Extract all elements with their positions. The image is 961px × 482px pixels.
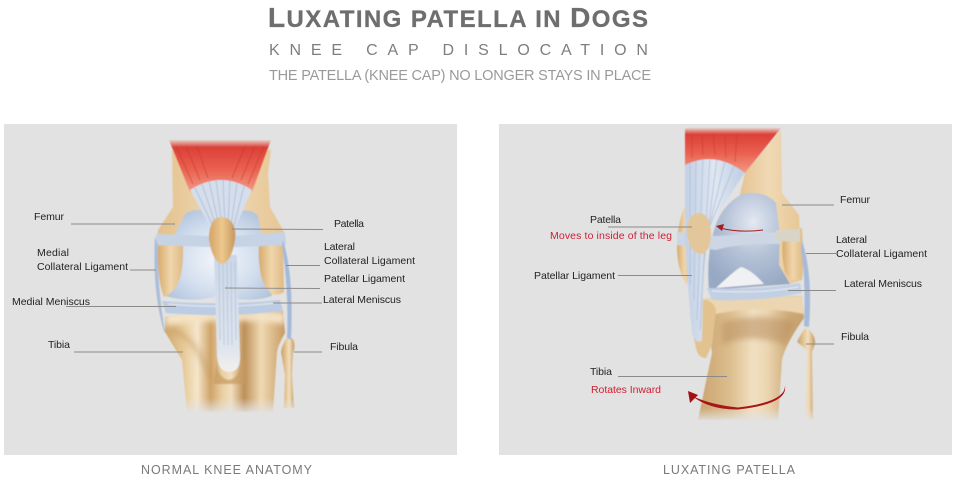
- tibia: [165, 310, 285, 412]
- label: Patella: [590, 214, 692, 227]
- label: Fibula: Fibula: [841, 331, 869, 343]
- ligament fibres: [219, 262, 236, 345]
- arrow: tibia rotates inward: [688, 386, 785, 410]
- label: Lateral Meniscus: [273, 294, 401, 306]
- subtitle: KNEE CAP DISLOCATION: [269, 42, 648, 59]
- label: Lateral Meniscus: Lateral Meniscus: [323, 294, 401, 306]
- label: Medial Collateral Ligament: Medial: [37, 247, 69, 259]
- tibial tuberosity: [690, 299, 716, 358]
- quadriceps muscle: [685, 128, 781, 173]
- tendon fibres: [690, 157, 734, 330]
- illustration: normal knee: [154, 140, 294, 412]
- fibula: [281, 338, 294, 408]
- notch: [716, 267, 764, 288]
- label: Lateral Meniscus: Lateral Meniscus: [844, 278, 922, 290]
- femoral condyles: [708, 193, 790, 290]
- label: Fibula: Fibula: [330, 341, 358, 353]
- arrow: patella moves inward: [716, 224, 763, 231]
- patella: [209, 217, 235, 264]
- caption: normal knee anatomy: NORMAL KNEE ANATOMY: [141, 463, 313, 477]
- caption: luxating patella: LUXATING PATELLA: [663, 463, 796, 477]
- femur: [156, 150, 284, 250]
- band over femur: [776, 229, 800, 242]
- label: Tibia: [590, 366, 727, 378]
- bottom fade: [175, 398, 305, 414]
- label: Patella: [232, 218, 364, 230]
- meniscus: [707, 283, 802, 300]
- tibia: [698, 296, 804, 420]
- tendon fan: [190, 180, 252, 226]
- label: Lateral Collateral Ligament: [286, 241, 415, 267]
- label: Tibia: [48, 339, 183, 352]
- label: Femur: [782, 194, 870, 206]
- label: Patella: Patella: [590, 214, 621, 226]
- meniscus highlight: [712, 287, 798, 292]
- label: Fibula: [806, 331, 869, 344]
- panel: normal knee anatomy: [4, 124, 457, 455]
- label: Medial Collateral Ligament: [37, 247, 156, 273]
- muscle fibres: [176, 146, 264, 184]
- fibula: [797, 327, 815, 420]
- transverse band: [677, 232, 780, 250]
- label: Patellar Ligament: Patellar Ligament: [534, 270, 615, 282]
- lateral femur condyle bone: [259, 245, 284, 295]
- femoral condyles: [165, 210, 272, 300]
- bottom fade: [690, 408, 820, 422]
- meniscus highlight: [168, 303, 276, 306]
- tagline: THE PATELLA (KNEE CAP) NO LONGER STAYS IN PLACE: [269, 68, 651, 84]
- label: Medial Collateral Ligament: Collateral Ligament: [37, 261, 128, 273]
- label: Tibia: Tibia: [590, 366, 612, 378]
- patella: [687, 213, 711, 254]
- callout: rotates inward: Rotates Inward: [591, 384, 661, 396]
- label: Lateral Collateral Ligament: Lateral: [836, 234, 867, 246]
- tendon and patellar ligament: [685, 157, 745, 342]
- label: Lateral Collateral Ligament: [806, 234, 927, 260]
- lateral femur condyle bone: [782, 228, 803, 280]
- panel: luxating patella: [499, 124, 952, 455]
- lateral collateral ligament: [801, 240, 810, 327]
- medial femur condyle bone: [158, 245, 183, 297]
- label: Femur: Femur: [34, 211, 64, 223]
- muscle fibres: [692, 134, 737, 162]
- medial femur edge: [677, 208, 692, 285]
- lateral collateral ligament: [282, 240, 292, 340]
- transverse ligament band: [156, 232, 286, 247]
- tibia shading: [706, 296, 804, 345]
- label: Lateral Collateral Ligament: Lateral: [324, 241, 355, 253]
- femur: [735, 130, 802, 284]
- label: Femur: Femur: [840, 194, 870, 206]
- title: LUXATING PATELLA IN DOGS: [268, 2, 648, 33]
- label: Patella: Patella: [334, 218, 364, 230]
- quadriceps muscle: [169, 140, 271, 192]
- label: Lateral Collateral Ligament: Collateral Ligament: [836, 248, 927, 260]
- label: Fibula: [294, 341, 358, 353]
- meniscus: [162, 300, 283, 315]
- tendon fibres: [195, 180, 244, 226]
- medial collateral ligament: [154, 236, 165, 332]
- tibia shading: [165, 312, 285, 384]
- patellar ligament: [214, 255, 240, 372]
- label: Lateral Collateral Ligament: Collateral Ligament: [324, 255, 415, 267]
- label: Tibia: Tibia: [48, 339, 70, 351]
- label: Patellar Ligament: Patellar Ligament: [324, 273, 405, 285]
- label: Lateral Meniscus: [788, 278, 922, 290]
- label: Medial Meniscus: Medial Meniscus: [12, 296, 90, 308]
- callout: moves to inside of the leg: Moves to inside of the leg: [550, 230, 672, 242]
- illustration: luxated knee: [677, 128, 815, 420]
